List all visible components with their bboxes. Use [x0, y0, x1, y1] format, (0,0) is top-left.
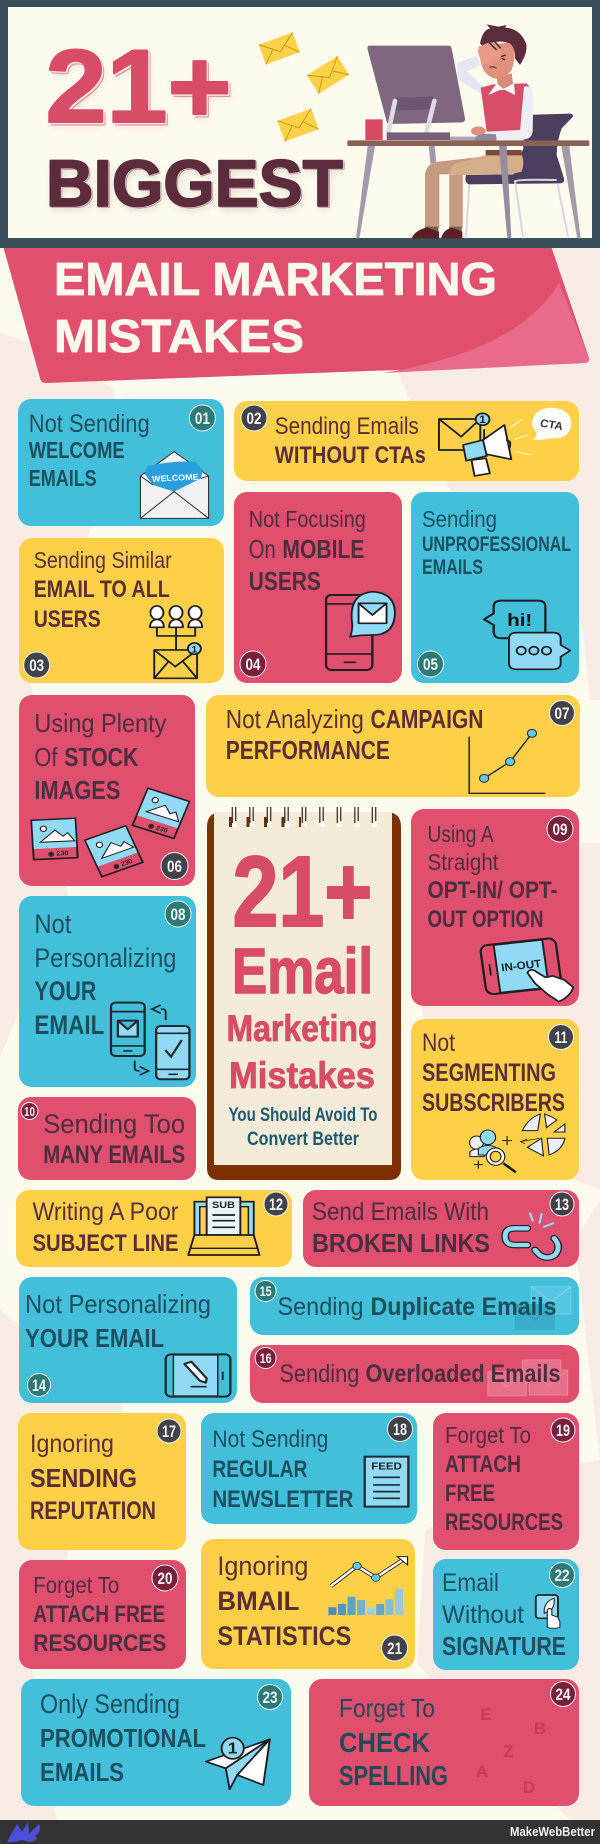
- badge: 22: [550, 1562, 574, 1588]
- text: 13: Send Emails With: [312, 1198, 489, 1226]
- panel: 16 sending overloaded emails: [250, 1345, 579, 1403]
- text: 23: Only Sending: [40, 1689, 180, 1719]
- subheading: you should avoid: Convert Better: [247, 1129, 360, 1150]
- text: 17: REPUTATION: [30, 1497, 156, 1525]
- icon: tablet with pen: [166, 1354, 230, 1397]
- panel: 03 sending similar email to all users: [19, 538, 224, 683]
- text: 09: Straight: [428, 849, 499, 875]
- badge: 16: [255, 1348, 276, 1368]
- icon: users to email: [150, 606, 202, 678]
- icon: ghost envelopes: [515, 1287, 571, 1330]
- badge: 04: 04: [246, 655, 261, 674]
- text: 06: [34, 708, 166, 805]
- icon: in-out phone and hand: [480, 938, 573, 1002]
- icon: stock images: ◉ 230: [48, 850, 69, 858]
- icon: paper plane: [206, 1738, 270, 1789]
- icon: scattered letters: Z: [503, 1742, 514, 1761]
- text: 12: [32, 1198, 178, 1257]
- icon: scattered letters: E: [480, 1705, 492, 1724]
- panel: 18 not sending regular newsletter: [201, 1413, 417, 1524]
- notebook: central title: [207, 807, 401, 1180]
- text: 24: CHECK: [339, 1727, 430, 1758]
- badge: 03: [24, 652, 50, 678]
- text: 04: Not Focusing: [249, 506, 366, 532]
- text: 21: Ignoring: [217, 1551, 308, 1581]
- text: 21: BMAIL: [217, 1586, 299, 1616]
- badge: 08: 08: [170, 905, 186, 924]
- title: BIGGEST: BIGGEST: [48, 150, 345, 224]
- icon: paper plane: 1: [228, 1741, 238, 1757]
- text: 10: Sending Too: [43, 1109, 185, 1139]
- badge: 18: 18: [393, 1420, 407, 1439]
- text: 14: YOUR EMAIL: [25, 1323, 164, 1353]
- text: 03: Sending Similar: [34, 547, 172, 573]
- badge: 05: 05: [423, 655, 438, 674]
- icon: stock images: ◉ 230: [147, 822, 169, 835]
- text: 05: EMAILS: [422, 556, 483, 579]
- text: 06: Using Plenty: [34, 708, 166, 738]
- badge: 15: [255, 1280, 276, 1302]
- heading: 21+ Email Marketing Mistakes: Mistakes: [229, 1055, 375, 1096]
- text: 15: Sending: [278, 1293, 364, 1321]
- badge: 14: 14: [32, 1376, 46, 1395]
- badge: 08: [165, 901, 191, 927]
- badge: 11: 11: [554, 1028, 568, 1047]
- badge: 24: [550, 1682, 576, 1706]
- text: 08: Personalizing: [34, 943, 176, 973]
- text: 08: Not: [34, 909, 72, 939]
- badge: 01: 01: [195, 409, 210, 428]
- text: 23: EMAILS: [40, 1757, 124, 1787]
- panel: 05 sending unprofessional emails: [411, 492, 579, 683]
- text: 13: BROKEN LINKS: [312, 1228, 490, 1258]
- text: 02: Sending Emails: [275, 413, 419, 440]
- subheading: you should avoid: [228, 1105, 378, 1150]
- text: 01: WELCOME: [29, 437, 125, 463]
- text: 11: [422, 1029, 565, 1117]
- badge: 23: 23: [262, 1688, 278, 1707]
- badge: 19: 19: [556, 1421, 570, 1440]
- banner: email marketing mistakes: MISTAKES: [54, 310, 304, 362]
- heading: 21+ Email Marketing Mistakes: Email: [232, 935, 373, 1007]
- panel: 23 only sending promotional emails: [21, 1679, 291, 1806]
- badge: 16: 16: [260, 1350, 272, 1366]
- icon: broken link: [505, 1213, 558, 1257]
- text: 09: OUT OPTION: [428, 906, 544, 933]
- title: BIGGEST: BIGGEST: [47, 147, 344, 221]
- text: 07: [226, 704, 484, 765]
- icon: scattered letters: D: [523, 1778, 535, 1797]
- text: 18: Not Sending: [212, 1426, 328, 1453]
- badge: 07: 07: [554, 704, 570, 723]
- badge: 12: [264, 1192, 288, 1216]
- icon: feed document: [365, 1457, 408, 1507]
- text: 20: Forget To: [33, 1572, 119, 1598]
- text: 24: [339, 1693, 448, 1791]
- panel: 04 not focusing on mobile users: [234, 492, 402, 683]
- text: 19: Forget To: [445, 1422, 531, 1448]
- text: 12: Writing A Poor: [32, 1198, 178, 1226]
- text: 08: YOUR: [34, 976, 96, 1006]
- text: 23: [40, 1689, 206, 1787]
- text: 08: EMAIL: [34, 1010, 104, 1040]
- icon: laptop subject: SUB: [212, 1201, 235, 1211]
- text: 04: USERS: [249, 566, 321, 596]
- text: 22: SIGNATURE: [442, 1631, 566, 1661]
- text: 04: MOBILE: [282, 534, 364, 564]
- notebook rings: [229, 807, 377, 827]
- text: 06: Of: [34, 742, 58, 772]
- text: 22: Without: [442, 1601, 524, 1629]
- icon: segmentation: [470, 1114, 565, 1172]
- badge: 06: [161, 852, 188, 880]
- text: 24: SPELLING: [339, 1760, 448, 1791]
- text: 04: [249, 506, 366, 596]
- banner: email marketing mistakes: [3, 246, 589, 383]
- badge: 23: [258, 1684, 282, 1710]
- text: 06: STOCK: [64, 742, 138, 772]
- text: 11: SEGMENTING: [422, 1059, 556, 1087]
- badge: 10: 10: [24, 1104, 35, 1119]
- title: BIGGEST: BIGGEST: [47, 147, 344, 221]
- footer logo: [7, 1822, 40, 1842]
- text: 18: REGULAR: [212, 1456, 307, 1483]
- text: 10: MANY EMAILS: [43, 1141, 185, 1169]
- badge: 12: 12: [269, 1195, 283, 1214]
- icon: envelope and megaphone: 1: [479, 415, 487, 426]
- text: 16: [279, 1360, 560, 1388]
- badge: 20: 20: [158, 1569, 172, 1588]
- panel: 12 writing a poor subject line: [16, 1190, 292, 1267]
- text: 23: PROMOTIONAL: [40, 1723, 206, 1753]
- panel: 14 not personalizing your email: [19, 1277, 237, 1403]
- badge: 09: [547, 816, 573, 842]
- text: 17: [30, 1430, 156, 1525]
- icon: phone with message: [326, 592, 395, 670]
- panel: 20 forget to attach free resources: [19, 1560, 186, 1669]
- badge: 15: 15: [260, 1283, 272, 1299]
- title: 21+: 21+: [48, 34, 234, 150]
- text: 14: [25, 1289, 211, 1353]
- icon: flying envelopes: [259, 32, 349, 141]
- icon: stock images: ◉ 230: [112, 858, 134, 871]
- icon: in-out phone and hand: IN-OUT: [500, 957, 543, 974]
- badge: 17: [157, 1419, 181, 1443]
- icon: envelope and megaphone: CTA: [539, 416, 565, 433]
- text: 18: [212, 1426, 353, 1513]
- text: 17: SENDING: [30, 1463, 137, 1493]
- badge: 19: [551, 1418, 575, 1442]
- text: 05: [422, 506, 571, 579]
- text: 13: [312, 1198, 490, 1258]
- badge: 22: 22: [554, 1566, 570, 1585]
- text: 11: Not: [422, 1029, 455, 1057]
- panel: 09 straight opt-in opt-out: [411, 809, 579, 1006]
- text: 07: PERFORMANCE: [226, 735, 390, 765]
- text: 02: [275, 413, 426, 469]
- text: 14: Not Personalizing: [25, 1289, 211, 1319]
- badge: 24: 24: [556, 1685, 571, 1704]
- text: 07: Not Analyzing: [226, 704, 364, 734]
- title: 21+: 21+: [47, 30, 233, 146]
- badge: 03: 03: [29, 656, 44, 675]
- panel: 17 ignoring sending reputation: [18, 1413, 186, 1550]
- text: 03: USERS: [34, 606, 101, 633]
- text: 19: RESOURCES: [445, 1509, 563, 1536]
- panel: 06 using plenty of stock images: [19, 695, 195, 886]
- panel: 10 sending too many emails: [18, 1097, 196, 1180]
- badge: 01: [189, 405, 215, 431]
- title: 21+: 21+: [48, 31, 234, 147]
- title: 21+: 21+: [46, 29, 232, 145]
- text: 02: WITHOUT CTAs: [275, 442, 426, 469]
- icon: chat bubbles: [484, 601, 570, 669]
- text: 22: [442, 1569, 566, 1661]
- panel: 22 email without signature: [433, 1559, 579, 1670]
- icon: scattered letters: [476, 1705, 546, 1797]
- text: 09: OPT-IN/ OPT-: [428, 877, 558, 904]
- panel: 01 not sending welcome emails: [18, 399, 224, 526]
- icon: envelope and megaphone: [439, 408, 571, 476]
- text: 21: STATISTICS: [217, 1621, 351, 1651]
- text: 03: [34, 547, 172, 633]
- badge: 14: [28, 1374, 50, 1396]
- text: 16: Sending: [279, 1360, 359, 1388]
- badge: 02: [241, 405, 267, 431]
- text: 18: NEWSLETTER: [212, 1486, 353, 1513]
- panel: 24 forget to check spelling: [309, 1679, 579, 1806]
- text: 06: IMAGES: [34, 775, 120, 805]
- footer: [0, 1820, 600, 1844]
- text: 17: Ignoring: [30, 1430, 114, 1458]
- badge: 04: [240, 651, 266, 677]
- text: 11: SUBSCRIBERS: [422, 1089, 565, 1117]
- text: 19: [445, 1422, 563, 1536]
- badge: 13: [550, 1192, 574, 1216]
- text: 19: ATTACH: [445, 1451, 521, 1478]
- heading: 21+ Email Marketing Mistakes: [226, 836, 378, 1096]
- icon: stock images: [31, 788, 189, 877]
- panel: 07 not analyzing campaign performance: [206, 695, 580, 797]
- badge: 06: 06: [167, 857, 182, 876]
- badge: 07: [550, 700, 574, 726]
- panel: 08 not personalizing your email: [19, 896, 196, 1087]
- badge: 18: [388, 1416, 412, 1442]
- text: 24: Forget To: [339, 1693, 435, 1723]
- text: 21: [217, 1551, 351, 1651]
- text: 16: Overloaded Emails: [366, 1360, 560, 1388]
- badge: 13: 13: [555, 1195, 569, 1214]
- text: 19: FREE: [445, 1480, 495, 1507]
- text: 09: Using A: [428, 821, 494, 847]
- badge: 20: [152, 1565, 178, 1591]
- badge: 21: [382, 1635, 408, 1661]
- text: 15: [278, 1293, 556, 1321]
- text: 20: [33, 1572, 166, 1657]
- panel: 02 sending emails without CTAs: [234, 401, 579, 481]
- text: 12: SUBJECT LINE: [32, 1230, 178, 1257]
- banner: email marketing mistakes: EMAIL MARKETING: [54, 253, 497, 305]
- icon: statistics chart: [328, 1557, 408, 1615]
- header panel: [0, 0, 600, 248]
- icon: two phones: [111, 1003, 189, 1079]
- icon: laptop subject: [188, 1197, 259, 1255]
- icon: users to email: 1: [191, 645, 198, 655]
- panel: 21 ignoring bmail statistics: [201, 1539, 415, 1669]
- text: 07: CAMPAIGN: [370, 704, 484, 734]
- text: 01: EMAILS: [29, 465, 97, 491]
- text: 20: RESOURCES: [33, 1630, 166, 1657]
- badge: 17: 17: [162, 1422, 176, 1441]
- text: 01: [29, 410, 150, 491]
- icon: ghost envelopes: [488, 1360, 568, 1396]
- icon: signature feather and hand: [536, 1595, 560, 1628]
- icon: welcome envelope: [140, 452, 209, 518]
- text: 09: [428, 821, 558, 933]
- icon: welcome envelope: WELCOME: [152, 472, 199, 484]
- text: 10: [43, 1109, 185, 1169]
- text: 22: Email: [442, 1569, 499, 1597]
- icon: scattered letters: B: [534, 1719, 546, 1738]
- text: 15: Duplicate Emails: [370, 1293, 556, 1321]
- title: BIGGEST: BIGGEST: [46, 146, 343, 220]
- illustration: frustrated man at desk: [347, 24, 589, 238]
- text: 20: ATTACH FREE: [33, 1601, 165, 1628]
- icon: chat bubbles: hi!: [507, 610, 532, 631]
- subheading: you should avoid: You Should Avoid To: [228, 1105, 378, 1126]
- heading: 21+ Email Marketing Mistakes: 21+: [232, 836, 372, 948]
- text: 01: Not Sending: [29, 410, 150, 438]
- panel: 11 not segmenting subscribers: [411, 1019, 579, 1180]
- icon: line chart: [469, 729, 545, 793]
- text: 04: On: [249, 534, 276, 564]
- badge: 09: 09: [552, 820, 568, 839]
- badge: 11: [548, 1024, 574, 1050]
- heading: 21+ Email Marketing Mistakes: Marketing: [226, 1008, 378, 1049]
- icon: scattered letters: A: [476, 1762, 488, 1781]
- icon: feed document: FEED: [371, 1461, 402, 1472]
- panel: 19 forget to attach free resources: [433, 1413, 579, 1550]
- text: 03: EMAIL TO ALL: [34, 576, 170, 603]
- text: 08: [34, 909, 176, 1040]
- badge: 05: [418, 651, 444, 677]
- badge: 21: 21: [387, 1639, 402, 1658]
- badge: 02: 02: [246, 409, 262, 428]
- panel: 13 send emails with broken links: [303, 1190, 579, 1267]
- text: 05: Sending: [422, 506, 497, 532]
- panel: 15 sending duplicate emails: [250, 1277, 579, 1335]
